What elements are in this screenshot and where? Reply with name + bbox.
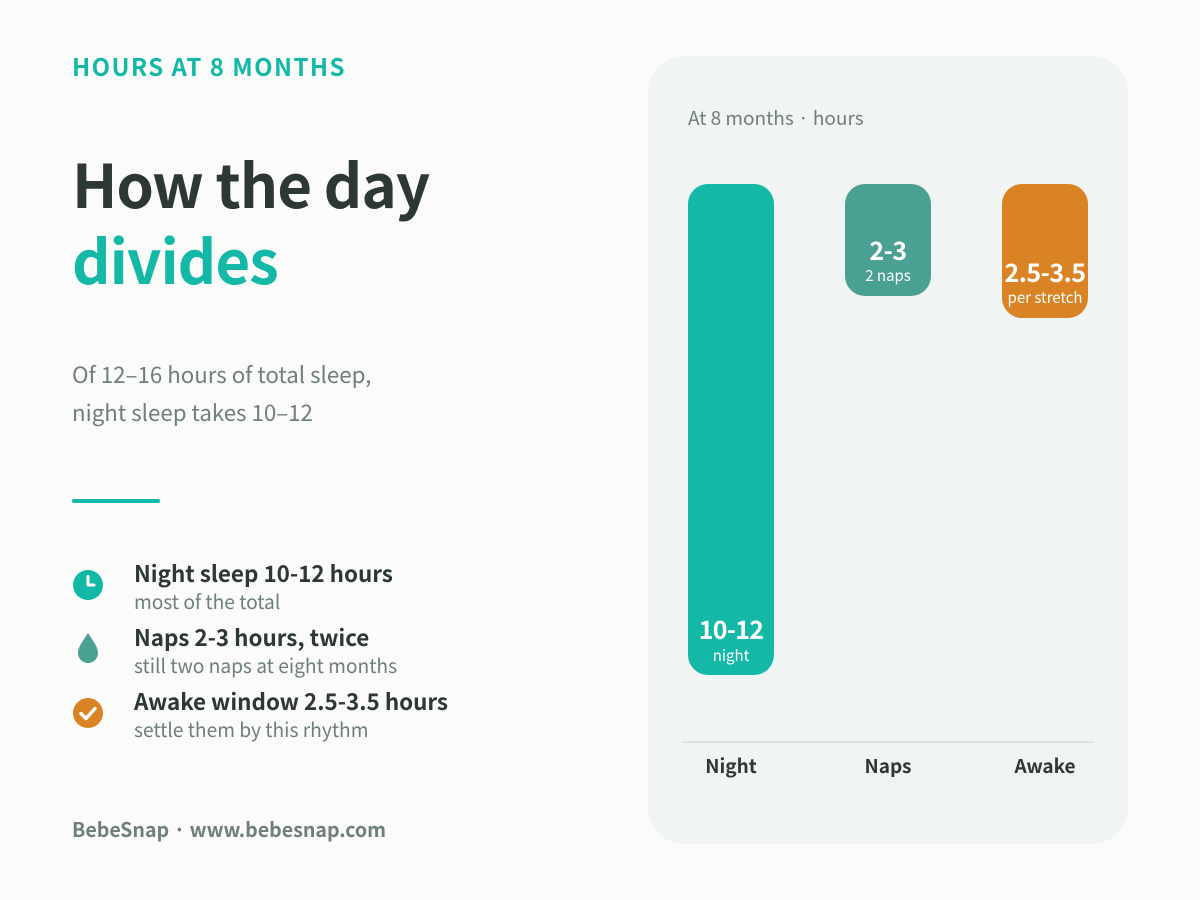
item: awake window <box>134 685 448 743</box>
icon: check <box>73 698 103 728</box>
item: awake window: Awake window 2.5-3.5 hours <box>134 685 448 717</box>
subtitle: night sleep takes 10–12 <box>72 396 313 428</box>
footer: BebeSnap · www.bebesnap.com <box>72 814 386 843</box>
bar: naps <box>845 184 931 296</box>
axis label: night: Night <box>705 752 757 779</box>
title: divides <box>72 215 278 302</box>
list of key facts <box>73 557 448 743</box>
subtitle <box>72 358 371 428</box>
item: night sleep: Night sleep 10-12 hours <box>134 557 393 589</box>
panel: chart <box>648 56 1128 844</box>
bar: awake <box>1002 184 1088 318</box>
bar: night: 10-12 <box>699 611 763 647</box>
item: night sleep: most of the total <box>134 587 280 615</box>
accent rule <box>72 499 160 503</box>
bar: awake: per stretch <box>1008 287 1082 308</box>
item: naps: Naps 2-3 hours, twice <box>134 621 369 653</box>
axis label: awake: Awake <box>1014 752 1076 779</box>
bar: naps: 2 naps <box>865 265 911 286</box>
subtitle: Of 12–16 hours of total sleep, <box>72 358 371 390</box>
title: How the day <box>72 139 429 226</box>
title <box>72 139 430 302</box>
bar: night: night <box>713 645 749 666</box>
item: naps: still two naps at eight months <box>134 651 397 679</box>
bar: awake: 2.5-3.5 <box>1004 254 1086 290</box>
icon: clock <box>73 570 103 600</box>
chart caption: At 8 months · hours <box>688 104 864 131</box>
item: naps <box>134 621 397 679</box>
axis line <box>682 741 1094 743</box>
item: night sleep <box>134 557 393 615</box>
axis label: naps: Naps <box>865 752 911 779</box>
item: awake window: settle them by this rhythm <box>134 715 368 743</box>
icon: drop <box>78 633 98 663</box>
bar: naps: 2-3 <box>869 232 907 268</box>
bar: night <box>688 184 774 675</box>
eyebrow: HOURS AT 8 MONTHS <box>72 48 346 83</box>
